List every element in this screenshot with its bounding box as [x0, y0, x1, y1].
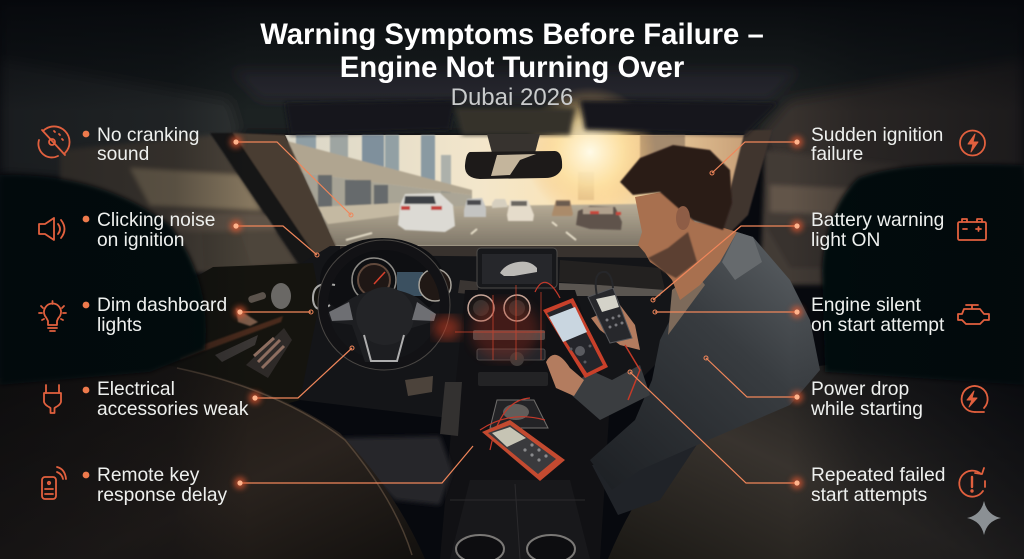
label: no cranking sound: No cranking [97, 125, 199, 146]
heading second line: Engine Not Turning Over [340, 51, 684, 84]
icon: bolt circle [960, 130, 985, 156]
headliner roof [0, 0, 1024, 200]
icon: alert refresh [959, 468, 985, 497]
callout: power drop [704, 356, 803, 403]
seat cushion left [340, 436, 452, 505]
label: remote key response: Remote key [97, 465, 199, 486]
right side window [760, 150, 900, 285]
pedals and floor [405, 376, 462, 436]
passenger seat and headrest [608, 164, 1024, 559]
trousers [592, 440, 700, 515]
arm [568, 365, 650, 420]
callout: engine silent [653, 306, 803, 318]
bullet [83, 216, 89, 222]
console scanner [482, 420, 565, 481]
label: electrical accessories weak: accessories weak [97, 399, 249, 420]
icon: gauge crossed [38, 126, 70, 157]
technician [546, 145, 820, 515]
label: sudden ignition failure: failure [811, 144, 863, 165]
icon: engine [958, 305, 989, 324]
subtitle: Dubai 2026 [451, 84, 573, 111]
callout: dim dashboard lights [234, 306, 313, 318]
windshield view [285, 86, 745, 246]
city towers [296, 135, 685, 200]
road [320, 203, 722, 246]
label: remote key response: response delay [97, 485, 228, 506]
instrument cluster [313, 238, 451, 322]
centre console [440, 290, 610, 559]
callout: remote key [234, 446, 473, 489]
label: dim dashboard lights: lights [97, 315, 142, 336]
callout: repeated failed starts [628, 370, 803, 489]
label: clicking noise: on ignition [97, 230, 184, 251]
icon: plug [44, 385, 61, 413]
icon: remote key [42, 467, 66, 499]
lane marks [346, 222, 576, 240]
icon: power cycle [962, 386, 988, 412]
title block [260, 18, 764, 111]
callout: battery warning [651, 220, 803, 302]
label: repeated failed starts: start attempts [811, 485, 927, 506]
callout: sudden ignition failure [710, 136, 803, 175]
label: repeated failed starts: Repeated failed [811, 465, 945, 486]
handheld scanner black [588, 272, 632, 343]
overpass [287, 141, 472, 195]
label: engine silent: on start attempt [811, 315, 945, 336]
callout: clicking noise [230, 220, 319, 257]
label: power drop: while starting [810, 399, 923, 420]
neck and face [635, 192, 737, 300]
icon: speaker [39, 218, 64, 240]
label: battery warning: Battery warning [811, 210, 944, 231]
label: engine silent: Engine silent [811, 295, 921, 316]
callout lines right [628, 136, 803, 489]
label: power drop: Power drop [811, 379, 909, 400]
sparkle watermark [967, 501, 1001, 535]
handheld scanner red [543, 298, 608, 378]
icon: battery [958, 219, 986, 240]
left door panel [150, 263, 320, 420]
heading: Warning Symptoms Before Failure – [260, 18, 764, 51]
right symptoms list [810, 125, 989, 506]
rear view mirror [465, 134, 562, 179]
left side window [60, 135, 300, 275]
pillars [210, 130, 772, 265]
bullet [83, 302, 89, 308]
centre screen [477, 248, 557, 288]
icon: light bulb [39, 301, 66, 331]
callout: accessories weak [249, 346, 354, 404]
bullet [83, 387, 89, 393]
shirt body [590, 232, 820, 490]
hair [620, 145, 732, 230]
label: sudden ignition failure: Sudden ignition [811, 125, 943, 146]
red glow on console wiring [433, 282, 560, 450]
label: battery warning: light ON [811, 230, 880, 251]
left symptoms list [38, 125, 249, 506]
driver seat and headrest [0, 175, 425, 559]
label: clicking noise: Clicking noise [97, 210, 215, 231]
traffic cars [398, 193, 622, 232]
collar [722, 232, 762, 280]
sun visors and roof console [285, 100, 778, 135]
beard [648, 232, 697, 278]
steering wheel [318, 240, 450, 370]
bullet [83, 131, 89, 137]
dashboard [290, 246, 690, 420]
label: no cranking sound: sound [97, 144, 149, 165]
callout: no cranking sound [230, 136, 353, 217]
hands [546, 355, 584, 396]
bullet [83, 472, 89, 478]
label: electrical accessories weak: Electrical [97, 379, 175, 400]
callout lines left [230, 136, 473, 489]
label: dim dashboard lights: Dim dashboard [97, 295, 227, 316]
